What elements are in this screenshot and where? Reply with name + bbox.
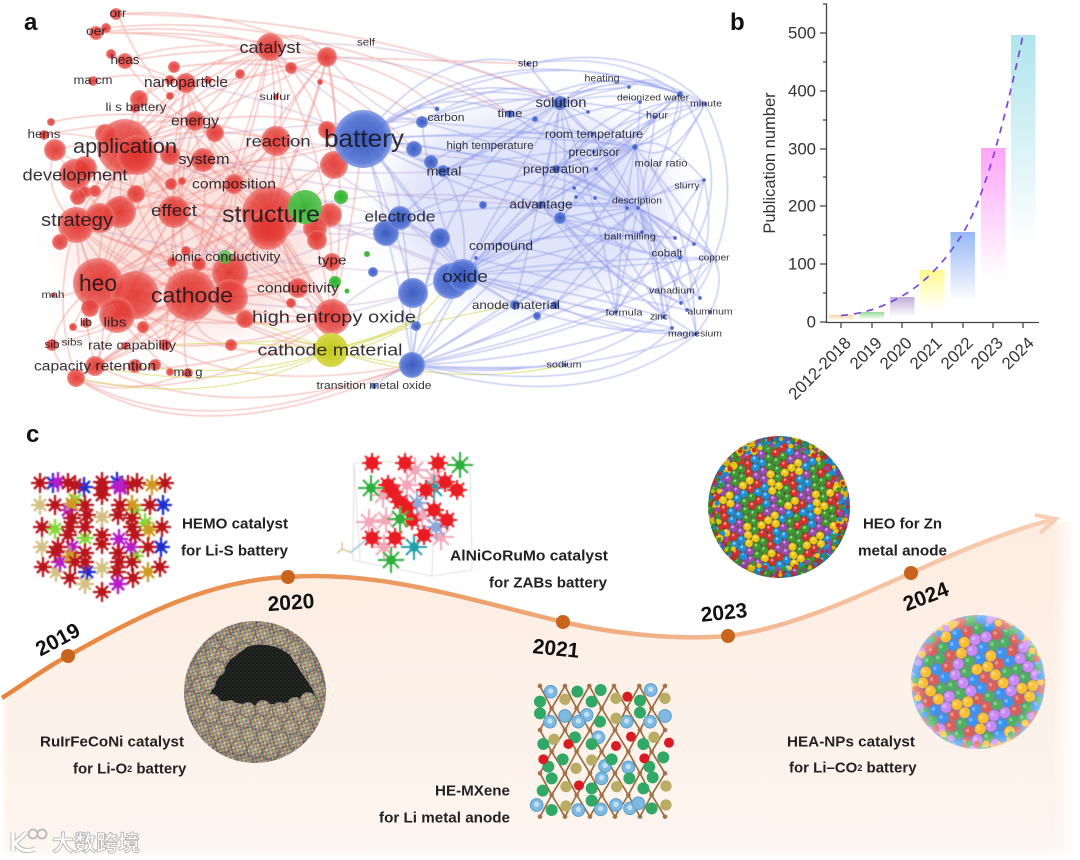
- caption: HE-MXene: for Li metal anode: [379, 810, 510, 826]
- caption: AlNiCoRuMo: for ZABs battery: [489, 574, 608, 592]
- keyword labels: energy: [171, 112, 220, 130]
- keyword labels: precursor: [568, 145, 620, 159]
- keyword labels: self: [357, 38, 375, 48]
- bars: [829, 35, 1036, 320]
- year labels: 2024: [900, 578, 952, 616]
- keyword labels: high temperature: [446, 140, 534, 152]
- keyword labels: description: [612, 196, 662, 206]
- y axis numbers: 500: [788, 24, 816, 42]
- keyword labels: sib: [44, 339, 60, 351]
- caption: HEO: HEO for Zn: [863, 516, 942, 532]
- y axis numbers: 0: [807, 312, 816, 332]
- compressed rim particles: [916, 620, 1040, 744]
- structure: AlNiCoRuMo cell: [337, 452, 473, 576]
- tan atoms: [548, 693, 672, 812]
- panel a: keyword co-occurrence network: [22, 6, 733, 416]
- keyword labels: aluminum: [688, 306, 733, 318]
- keyword labels: carbon: [428, 112, 464, 124]
- panel letter c: c: [26, 421, 39, 448]
- green keyword nodes: [218, 190, 370, 294]
- keyword labels: hems: [28, 129, 61, 141]
- trend line: [841, 35, 1023, 316]
- caption: HEO: metal anode: [858, 542, 947, 560]
- timeline curve: [2, 519, 1055, 698]
- keyword labels: electrode: [364, 208, 436, 226]
- keyword labels: structure: [222, 201, 320, 227]
- keyword labels: time: [498, 108, 522, 120]
- rim particles: [197, 625, 323, 718]
- keyword labels: application: [73, 136, 177, 158]
- lattice nodes: [538, 684, 667, 819]
- keyword labels: copper: [698, 252, 730, 264]
- x axis years: 2019: [846, 333, 886, 373]
- panel c: timeline of high entropy materials: [0, 421, 1076, 860]
- keyword labels: rate capability: [88, 338, 177, 352]
- red atoms: [538, 692, 674, 790]
- keyword labels: cobalt: [652, 248, 683, 260]
- keyword labels: compound: [469, 239, 533, 253]
- blue atoms: [530, 684, 671, 816]
- keyword labels: reaction: [246, 134, 310, 150]
- keyword labels: development: [22, 166, 128, 184]
- green atoms: [534, 684, 669, 816]
- year labels: 2020: [267, 590, 315, 616]
- keyword labels: slurry: [674, 180, 700, 192]
- keyword labels: hour: [646, 110, 669, 122]
- y axis numbers: 300: [788, 140, 816, 158]
- keyword labels: type: [318, 252, 346, 268]
- keyword labels: catalyst: [240, 39, 301, 57]
- keyword labels: ma g: [174, 365, 202, 379]
- keyword labels: mah: [42, 289, 65, 301]
- keyword labels: ball milling: [604, 232, 656, 242]
- dark cavity: [208, 645, 316, 706]
- caption: RuIrFeCoNi: for Li-O2 battery: [73, 760, 187, 778]
- atom highlights: [534, 687, 653, 812]
- compressed rim particles: [711, 439, 847, 575]
- keyword labels: zinc: [650, 312, 668, 322]
- bonds: [540, 686, 665, 817]
- keyword labels: effect: [151, 202, 197, 220]
- red keyword links: [44, 13, 560, 416]
- x axis years: 2022: [937, 333, 977, 373]
- captions: [40, 516, 947, 826]
- keyword labels: strategy: [41, 210, 113, 230]
- keyword labels: ma cm: [74, 75, 112, 87]
- y axis title: Publication number: [761, 92, 779, 234]
- structure: HEA nanoparticle sphere: [908, 612, 1048, 752]
- keyword labels: deionized water: [617, 92, 689, 104]
- keyword labels: preparation: [523, 162, 589, 176]
- keyword labels: metal: [426, 164, 462, 178]
- year labels: 2023: [700, 599, 748, 627]
- keyword labels: orr: [110, 6, 126, 20]
- y axis numbers: 100: [788, 254, 816, 274]
- keyword labels: magnesium: [668, 328, 722, 340]
- keyword labels: room temperature: [545, 127, 643, 141]
- keyword labels: composition: [192, 176, 276, 192]
- keyword labels: li s battery: [106, 100, 166, 114]
- caption: RuIrFeCoNi: [40, 734, 187, 778]
- density wash behind the links: [70, 110, 670, 335]
- coordinate axes: [337, 542, 350, 553]
- keyword labels: step: [518, 58, 538, 70]
- arrow head: [1035, 515, 1056, 533]
- blue keyword links: [76, 44, 728, 386]
- structure: HE-MXene lattice: [530, 684, 674, 819]
- keyword labels: [22, 6, 733, 392]
- keyword labels: oxide: [442, 268, 488, 286]
- keyword labels: heo: [79, 270, 117, 296]
- keyword labels: conductivity: [257, 280, 339, 296]
- keyword labels: sulfur: [260, 91, 291, 103]
- watermark: 大数跨境: [52, 831, 140, 856]
- caption: HEO: [858, 516, 947, 560]
- keyword labels: sibs: [62, 338, 82, 348]
- keyword labels: cathode: [151, 284, 233, 308]
- shaded area under the timeline: [0, 500, 1076, 860]
- keyword labels: heas: [110, 53, 140, 67]
- caption: HEA-NPs: [787, 734, 917, 776]
- structure: HEO sphere: [705, 433, 853, 581]
- keyword labels: molar ratio: [634, 158, 688, 170]
- panel letter b: b: [730, 9, 745, 36]
- red keyword nodes: [39, 8, 350, 387]
- panel letter a: a: [24, 9, 38, 36]
- caption: AlNiCoRuMo: AlNiCoRuMo catalyst: [450, 548, 608, 564]
- keyword labels: sodium: [546, 360, 582, 370]
- keyword labels: transition metal oxide: [316, 380, 432, 392]
- caption: HEA-NPs: HEA-NPs catalyst: [787, 734, 915, 750]
- axes and ticks: [820, 4, 1039, 328]
- yellow keyword node: [314, 333, 348, 367]
- x axis years: [785, 333, 1038, 404]
- y axis numbers: [788, 24, 816, 332]
- keyword labels: oer: [86, 24, 106, 38]
- keyword labels: battery: [324, 125, 405, 153]
- structure: hollow RuIrFeCoNi sphere: [184, 621, 326, 763]
- year labels: 2019: [32, 619, 84, 661]
- caption: HEMO: [181, 516, 289, 560]
- keyword labels: cathode material: [258, 340, 402, 360]
- y axis numbers: 400: [788, 82, 816, 100]
- keyword labels: system: [178, 152, 230, 168]
- yellow cathode-material links: [76, 281, 565, 389]
- keyword labels: capacity retention: [34, 358, 156, 374]
- caption: HE-MXene: HE-MXene: [435, 782, 510, 800]
- keyword labels: anode material: [472, 298, 560, 312]
- year labels: [32, 578, 952, 663]
- x axis years: 2023: [967, 333, 1007, 373]
- x axis years: 2024: [998, 333, 1038, 373]
- watermark: [13, 830, 140, 856]
- keyword labels: libs: [104, 314, 127, 330]
- caption: RuIrFeCoNi: RuIrFeCoNi catalyst: [40, 734, 184, 750]
- keyword labels: ionic conductivity: [172, 250, 281, 264]
- keyword labels: vanadium: [649, 286, 695, 296]
- keyword labels: solution: [536, 94, 586, 110]
- keyword labels: nanoparticle: [144, 75, 228, 91]
- keyword labels: lib: [80, 317, 92, 329]
- panel b: publication number bar chart: [730, 4, 1039, 404]
- caption: HEMO: for Li-S battery: [181, 542, 289, 560]
- keyword labels: formula: [606, 308, 643, 318]
- structure: HEMO crystal: [31, 472, 174, 602]
- year labels: 2021: [532, 635, 581, 663]
- keyword labels: minute: [690, 98, 722, 110]
- x axis years: 2012-2018: [785, 333, 855, 404]
- caption: HEA-NPs: for Li–CO2 battery: [789, 760, 917, 776]
- caption: HEMO: HEMO catalyst: [182, 516, 288, 532]
- keyword labels: heating: [584, 74, 620, 84]
- x axis years: 2021: [906, 333, 946, 373]
- y axis numbers: 200: [788, 196, 816, 216]
- blue keyword nodes: [334, 62, 712, 389]
- timeline markers: [61, 566, 918, 663]
- x axis years: 2020: [876, 333, 916, 373]
- caption: HE-MXene: [379, 782, 510, 826]
- keyword labels: advantage: [510, 196, 572, 212]
- keyword labels: high entropy oxide: [252, 308, 416, 326]
- caption: AlNiCoRuMo: [450, 548, 608, 592]
